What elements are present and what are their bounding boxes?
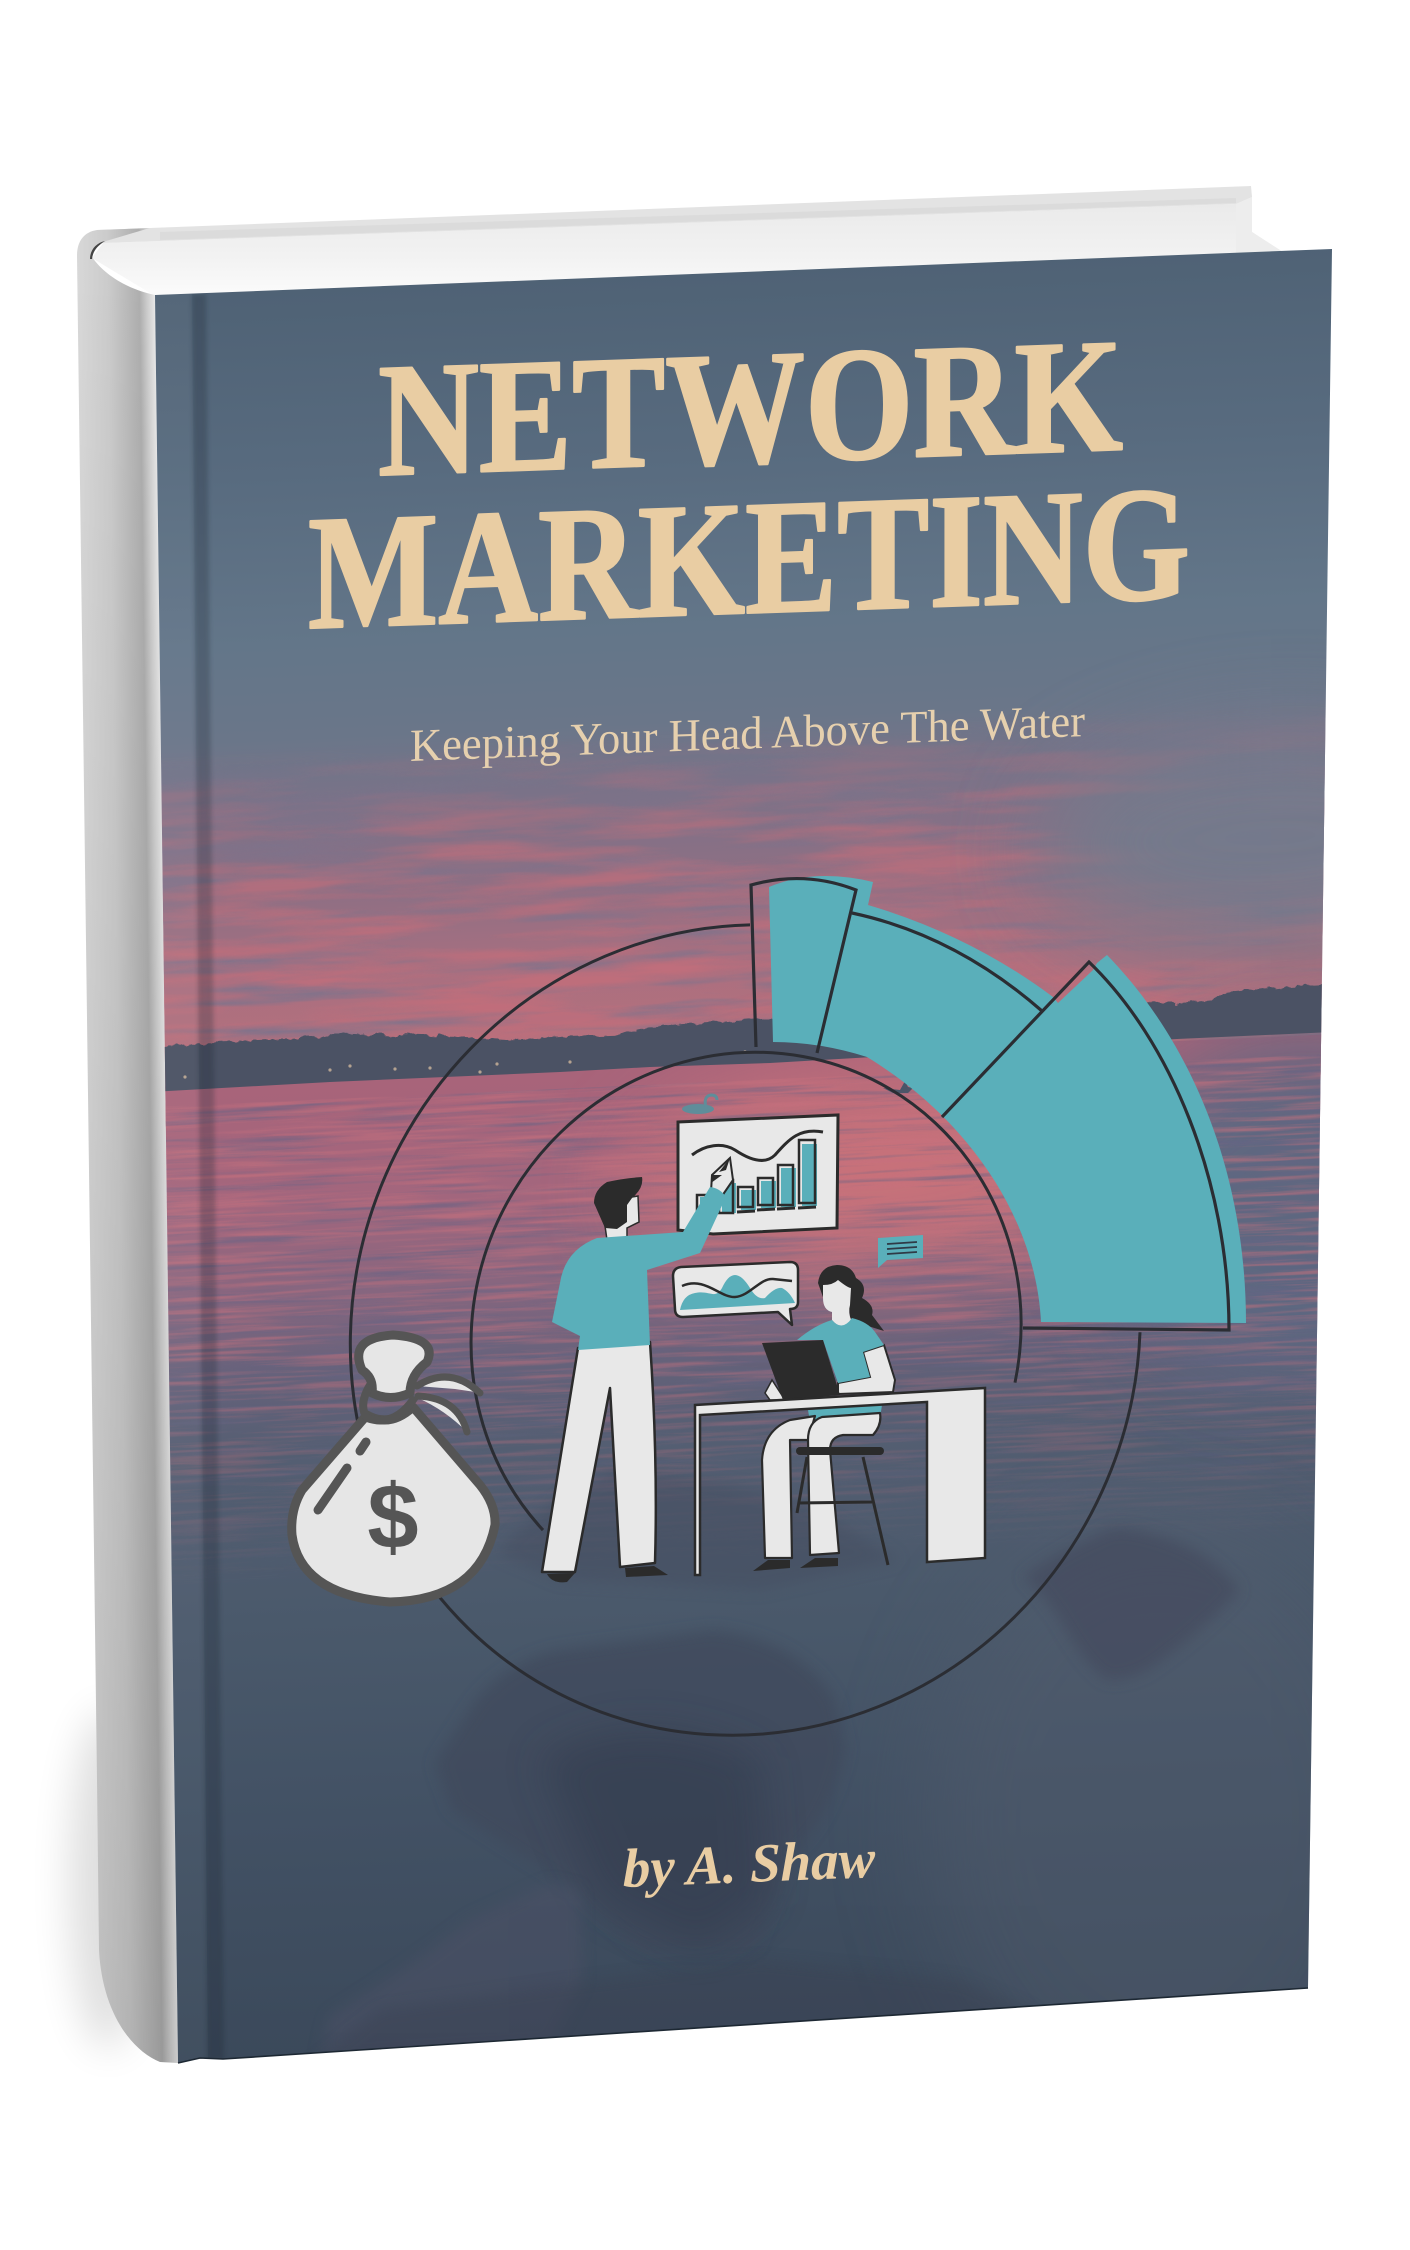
neck and face — [605, 1196, 639, 1240]
desk — [695, 1388, 985, 1575]
shoes — [547, 1566, 668, 1582]
near arm — [838, 1345, 895, 1394]
far leg — [762, 1416, 815, 1558]
shoes — [753, 1558, 838, 1571]
author: by A. Shaw — [623, 1828, 875, 1899]
book pages and back cover top — [92, 186, 1283, 296]
far hand — [765, 1380, 785, 1400]
drop shadow beside spine — [70, 1710, 146, 2050]
title line: MARKETING: MARKETING — [308, 454, 1190, 664]
trend line — [692, 1131, 823, 1160]
laptop — [762, 1340, 840, 1400]
small teal message icon — [878, 1235, 923, 1268]
hair — [594, 1177, 642, 1229]
title — [308, 306, 1190, 664]
highlights — [318, 1442, 366, 1510]
subtitle: Keeping Your Head Above The Water — [410, 695, 1085, 771]
title line: NETWORK: NETWORK — [378, 306, 1123, 511]
infographic: 3D book mockup — [58, 186, 1332, 2064]
figure: woman at desk — [753, 1265, 895, 1571]
hair — [818, 1265, 884, 1331]
teal shirt hem — [808, 1405, 882, 1422]
near leg — [808, 1413, 880, 1555]
spine hinge groove — [192, 294, 223, 2058]
tie ribbons — [417, 1377, 482, 1432]
photo: dusk sky and lake — [155, 249, 1332, 2062]
pants — [542, 1342, 656, 1572]
cover artwork — [155, 249, 1332, 2062]
tie ring — [363, 1385, 415, 1420]
pointing hand — [711, 1158, 733, 1196]
distant hills — [164, 984, 1322, 1092]
teal shirt — [552, 1187, 726, 1350]
book spine — [77, 228, 178, 2063]
teal chart segments fill — [769, 876, 1246, 1323]
presentation board — [678, 1115, 838, 1234]
face and neck — [823, 1280, 851, 1326]
chart rings — [350, 911, 1140, 1749]
dollar sign: $ — [367, 1466, 419, 1568]
bag body — [292, 1407, 495, 1602]
bag knot top — [359, 1335, 429, 1398]
swan and boat on the water — [682, 1081, 913, 1114]
rocks in the foreground — [305, 1470, 1240, 2070]
radial chart — [350, 876, 1246, 1749]
segment outlines — [751, 879, 1229, 1330]
icon: money bag — [292, 1335, 495, 1602]
teal top — [797, 1318, 884, 1383]
cover bottom edge — [178, 1988, 1308, 2063]
stool — [797, 1451, 888, 1565]
bar chart — [697, 1140, 817, 1214]
speech bubble chart — [673, 1262, 798, 1325]
figure: man pointing at board — [542, 1158, 733, 1582]
